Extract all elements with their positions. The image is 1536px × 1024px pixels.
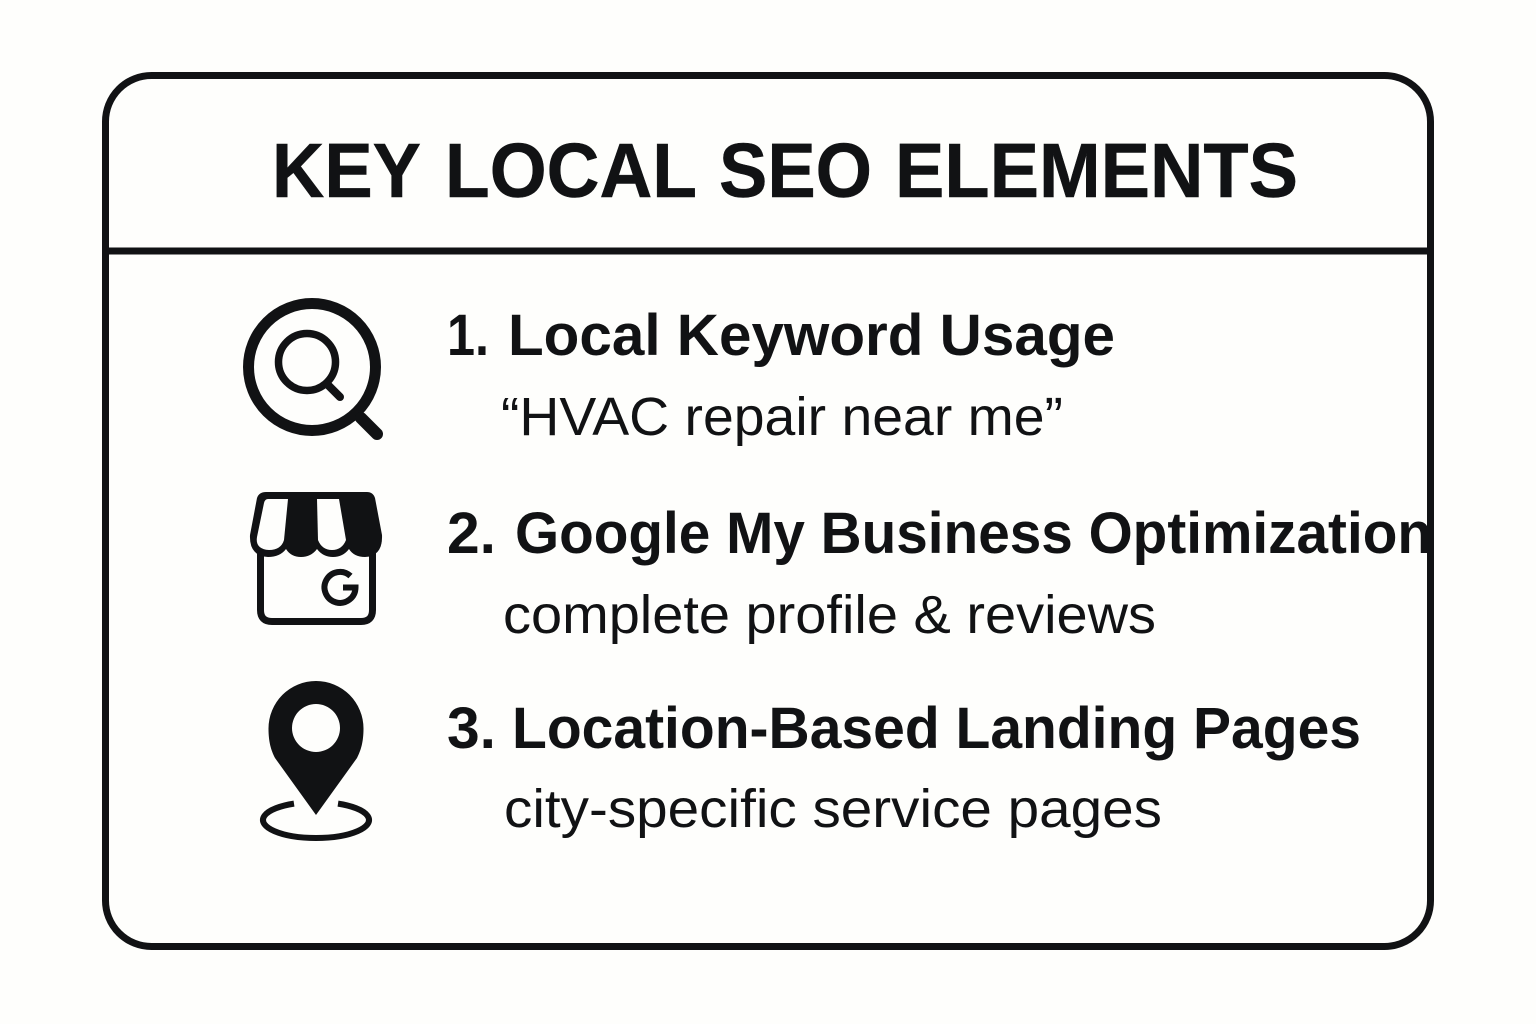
title: SEO: [719, 128, 872, 214]
item 1 description: “HVAC repair near me”: [501, 387, 1063, 447]
icon: map pin on ring: [263, 681, 369, 838]
title: LOCAL: [445, 128, 697, 214]
item 3 heading: 3.: [447, 696, 496, 761]
item 3 heading: Location-Based Landing Pages: [512, 696, 1361, 761]
item 3 description: city-specific service pages: [504, 779, 1162, 839]
item 1 heading: Local Keyword Usage: [508, 303, 1115, 368]
item 2: google my business optimization: [447, 501, 1432, 645]
item 1: local keyword usage: [447, 303, 1115, 447]
item 2 heading: Google My Business Optimization: [515, 501, 1432, 566]
item 1 heading: 1.: [447, 303, 489, 368]
title: KEY: [272, 128, 421, 214]
icon: storefront with G: [250, 492, 382, 622]
icon: magnifier with inner magnifier: [248, 304, 377, 434]
item 2 description: complete profile & reviews: [503, 585, 1156, 645]
item 3: location-based landing pages: [447, 696, 1361, 839]
item 2 heading: 2.: [447, 501, 496, 566]
panel: rounded card with header divider: [106, 76, 1430, 946]
title: ELEMENTS: [895, 128, 1298, 214]
title: [272, 128, 1298, 214]
